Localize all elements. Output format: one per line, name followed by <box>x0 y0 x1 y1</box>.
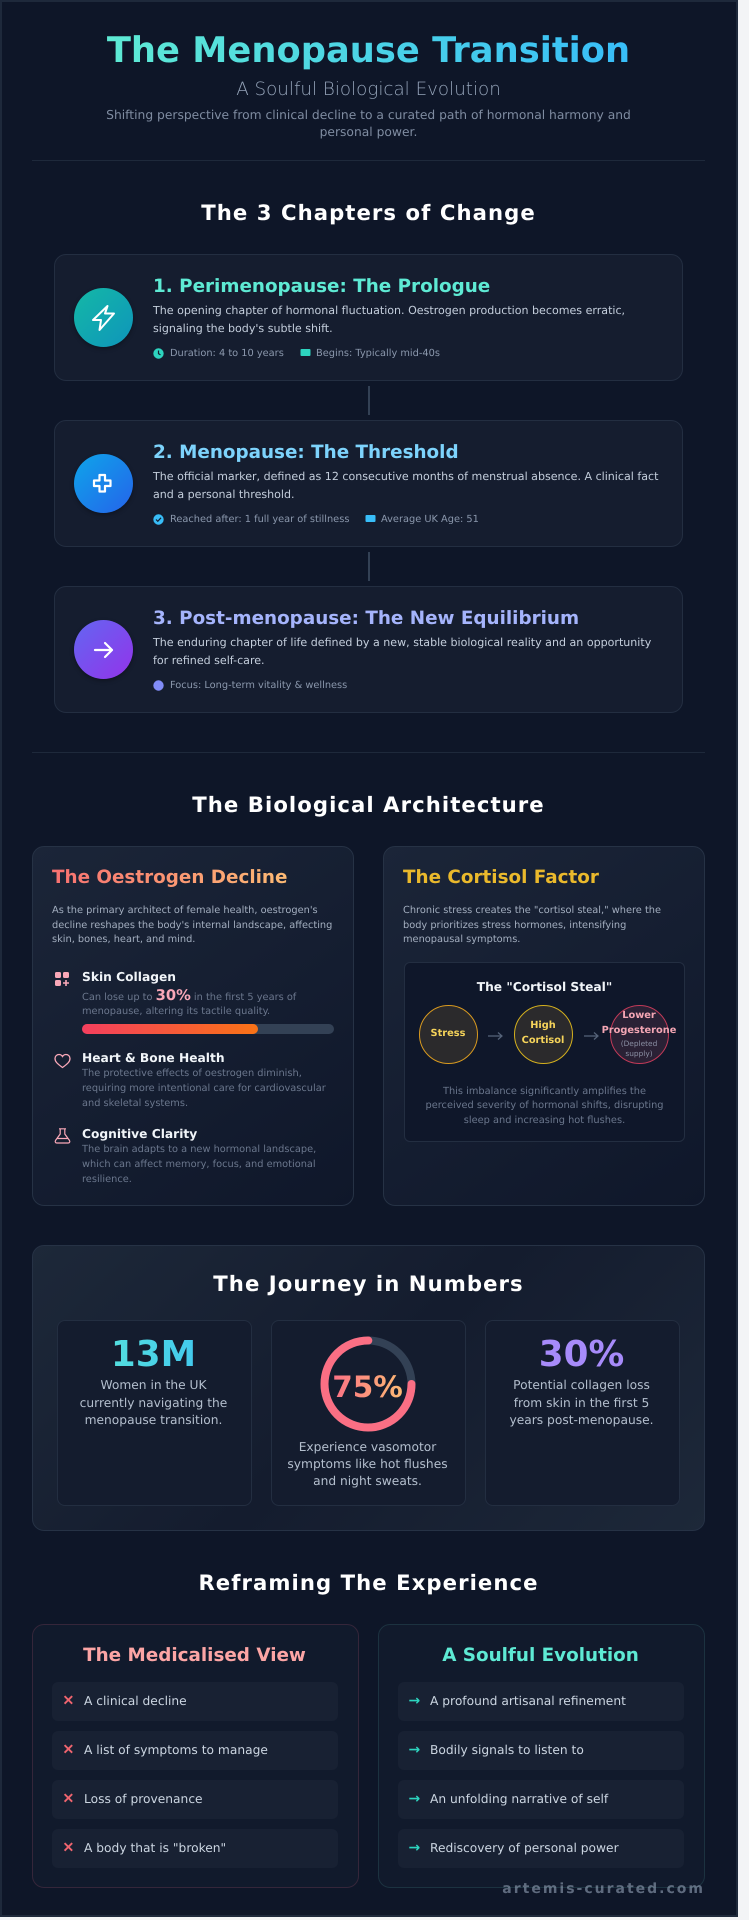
intro text <box>52 905 332 945</box>
progress bar <box>82 1024 334 1034</box>
diagram caption <box>426 1086 664 1126</box>
stat text: symptoms like hot flushes <box>287 1457 448 1471</box>
node: high cortisol <box>514 1005 573 1064</box>
stat text: Potential collagen loss <box>513 1378 650 1392</box>
panel heading: The Oestrogen Decline <box>52 867 287 888</box>
stat card: 30% <box>485 1320 680 1506</box>
row 4: ✕ <box>62 1840 74 1856</box>
arrow <box>488 1032 503 1040</box>
connector <box>368 552 370 581</box>
heading: biological architecture: The Biological Architecture <box>192 792 545 817</box>
donut chart <box>320 1336 416 1432</box>
title: The Menopause Transition <box>107 30 630 71</box>
row 3: ✕ <box>62 1791 74 1807</box>
heading: The Journey in Numbers <box>213 1271 524 1296</box>
chapter 3 description: The enduring chapter of life defined by a new, stable biological reality and an opportunity <box>153 636 651 649</box>
icon: arrow <box>74 620 133 679</box>
arrow <box>584 1032 599 1040</box>
item text: cognitive clarity <box>82 1144 316 1185</box>
row 3: Loss of provenance <box>84 1792 203 1806</box>
row 1: → <box>408 1693 420 1709</box>
diagram title: The "Cortisol Steal" <box>477 980 612 994</box>
panel: soulful evolution <box>378 1624 705 1888</box>
item text: skin collagen: menopause, altering its tactile quality. <box>82 1006 270 1017</box>
panel: chapter 2: Reached after: 1 full year of stillness <box>170 514 349 525</box>
item text: heart and bone: The protective effects of oestrogen diminish, <box>82 1068 302 1079</box>
row 1 <box>398 1682 684 1720</box>
item text: cognitive clarity: which can affect memory, focus, and emotional <box>82 1159 316 1170</box>
panel: journey in numbers <box>32 1245 705 1531</box>
intro text: menopausal symptoms. <box>403 934 520 945</box>
diagram caption: perceived severity of hormonal shifts, disrupting <box>426 1100 664 1111</box>
stat text: from skin in the first 5 <box>514 1396 649 1410</box>
stat text: Women in the UK <box>100 1378 207 1392</box>
stat text <box>509 1378 654 1427</box>
stat text <box>80 1378 227 1427</box>
row 4 <box>398 1829 684 1868</box>
chapter 1 heading: 1. Perimenopause: The Prologue <box>153 276 490 296</box>
row 2 <box>398 1731 684 1770</box>
intro text: As the primary architect of female health, oestrogen's <box>52 905 318 916</box>
panel: chapter 3: Focus: Long-term vitality & wellness <box>170 680 347 691</box>
panel: chapter 2: Average UK Age: 51 <box>381 514 479 525</box>
item title: heart and bone: Heart & Bone Health <box>82 1051 225 1065</box>
intro text: decline reshapes the body's internal landscape, affecting <box>52 920 332 931</box>
diagram caption: sleep and increasing hot flushes. <box>464 1115 625 1126</box>
node: lower progesterone: Progesterone <box>602 1025 676 1036</box>
panel: oestrogen decline <box>32 846 354 1206</box>
item text: cognitive clarity: The brain adapts to a new hormonal landscape, <box>82 1144 316 1155</box>
item title: skin collagen: Skin Collagen <box>82 970 176 984</box>
item text: heart and bone <box>82 1068 326 1109</box>
icon: cross <box>74 454 133 513</box>
stat card: 13M <box>57 1320 252 1506</box>
node: lower progesterone: supply) <box>625 1048 653 1058</box>
item text: cognitive clarity: resilience. <box>82 1174 132 1185</box>
row 3 <box>398 1780 684 1818</box>
item title: cognitive clarity: Cognitive Clarity <box>82 1127 197 1141</box>
panel: chapter 3 <box>54 586 683 713</box>
diagram caption: This imbalance significantly amplifies the <box>443 1086 646 1096</box>
intro text: skin, bones, heart, and mind. <box>52 934 195 945</box>
row 2: ✕ <box>62 1742 74 1758</box>
row 1 <box>52 1682 338 1720</box>
icon: flask <box>54 1128 70 1144</box>
node: high cortisol: High <box>530 1020 556 1031</box>
connector <box>368 386 370 415</box>
row 2: Bodily signals to listen to <box>430 1743 584 1757</box>
row 3: An unfolding narrative of self <box>430 1792 608 1806</box>
meta: average age <box>366 514 479 525</box>
tagline: Shifting perspective from clinical decline to a curated path of hormonal harmony and <box>106 108 631 122</box>
panel: chapter 1: Duration: 4 to 10 years <box>170 348 284 359</box>
row 4 <box>52 1829 338 1868</box>
meta: begins <box>300 348 440 359</box>
stat text: menopause transition. <box>85 1413 222 1427</box>
row 2: → <box>408 1742 420 1758</box>
chapter 1 description <box>152 304 625 335</box>
panel: medicalised view <box>32 1624 359 1888</box>
meta: reached <box>153 514 349 525</box>
chapter 3 description: for refined self-care. <box>153 654 265 667</box>
row 1: ✕ <box>62 1693 74 1709</box>
stat number <box>57 1335 250 1375</box>
item text: skin collagen: Can lose up to 30% in the first 5 years of <box>82 987 296 1004</box>
row 4: Rediscovery of personal power <box>430 1841 619 1855</box>
chapter 2 heading: 2. Menopause: The Threshold <box>153 442 459 462</box>
icon: bolt <box>74 288 133 347</box>
heading: chapters: The 3 Chapters of Change <box>201 200 536 225</box>
node: lower progesterone: Lower <box>622 1010 656 1021</box>
heading: reframing: Reframing The Experience <box>198 1570 539 1595</box>
chapter 3 description <box>152 636 651 667</box>
panel heading: The Medicalised View <box>83 1645 306 1666</box>
node: stress <box>419 1005 478 1064</box>
tagline <box>106 108 631 139</box>
row 4: → <box>408 1840 420 1856</box>
chapter 1 description: The opening chapter of hormonal fluctuation. Oestrogen production becomes erratic, <box>153 304 625 317</box>
icon: collagen grid <box>55 972 69 986</box>
row 3 <box>52 1780 338 1818</box>
row 4: A body that is "broken" <box>84 1841 226 1855</box>
meta: focus <box>153 680 347 691</box>
node: lower progesterone <box>610 1005 669 1064</box>
stat text: currently navigating the <box>80 1396 227 1410</box>
panel: chapter 1 <box>54 254 683 381</box>
node: high cortisol: Cortisol <box>522 1035 564 1046</box>
intro text: Chronic stress creates the "cortisol steal," where the <box>403 905 661 916</box>
chapter 3 heading: 3. Post-menopause: The New Equilibrium <box>153 608 579 628</box>
stat number: 13M <box>111 1334 196 1375</box>
node: stress: Stress <box>431 1028 465 1038</box>
chapter 2 description: and a personal threshold. <box>153 488 295 501</box>
stat number: 30% <box>539 1334 624 1375</box>
stat card: 75% <box>271 1320 466 1506</box>
stat text: years post-menopause. <box>509 1413 654 1427</box>
chapter 2 description <box>152 470 658 501</box>
stat text <box>287 1440 448 1488</box>
row 2 <box>52 1731 338 1770</box>
meta: duration <box>153 348 284 359</box>
row 2: A list of symptoms to manage <box>84 1743 268 1757</box>
row 1: A profound artisanal refinement <box>430 1694 626 1708</box>
item text: heart and bone: requiring more intentional care for cardiovascular <box>82 1083 326 1094</box>
diagram: cortisol steal <box>404 962 685 1142</box>
item text: heart and bone: and skeletal systems. <box>82 1098 188 1109</box>
stat number <box>485 1335 678 1375</box>
panel heading: The Cortisol Factor <box>403 867 599 888</box>
tagline: personal power. <box>320 125 417 139</box>
stat text: Experience vasomotor <box>299 1440 436 1454</box>
item text: skin collagen <box>82 987 296 1017</box>
icon: heart <box>54 1054 71 1068</box>
panel: cortisol factor <box>383 846 705 1206</box>
panel: chapter 1: Begins: Typically mid-40s <box>316 348 440 359</box>
subtitle: A Soulful Biological Evolution <box>236 79 501 100</box>
panel heading: A Soulful Evolution <box>442 1645 639 1666</box>
row 1: A clinical decline <box>84 1694 187 1708</box>
stat number: 75% <box>332 1370 403 1404</box>
row 3: → <box>408 1791 420 1807</box>
intro text: body prioritizes stress hormones, intensifying <box>403 920 626 931</box>
panel: chapter 2 <box>54 420 683 547</box>
chapter 2 description: The official marker, defined as 12 consecutive months of menstrual absence. A clinical fact <box>153 470 658 483</box>
watermark: artemis-curated.com <box>502 1880 705 1896</box>
stat text: and night sweats. <box>313 1474 422 1488</box>
chapter 1 description: signaling the body's subtle shift. <box>153 322 333 335</box>
intro text <box>403 905 661 945</box>
node: lower progesterone: (Depleted <box>621 1038 657 1048</box>
